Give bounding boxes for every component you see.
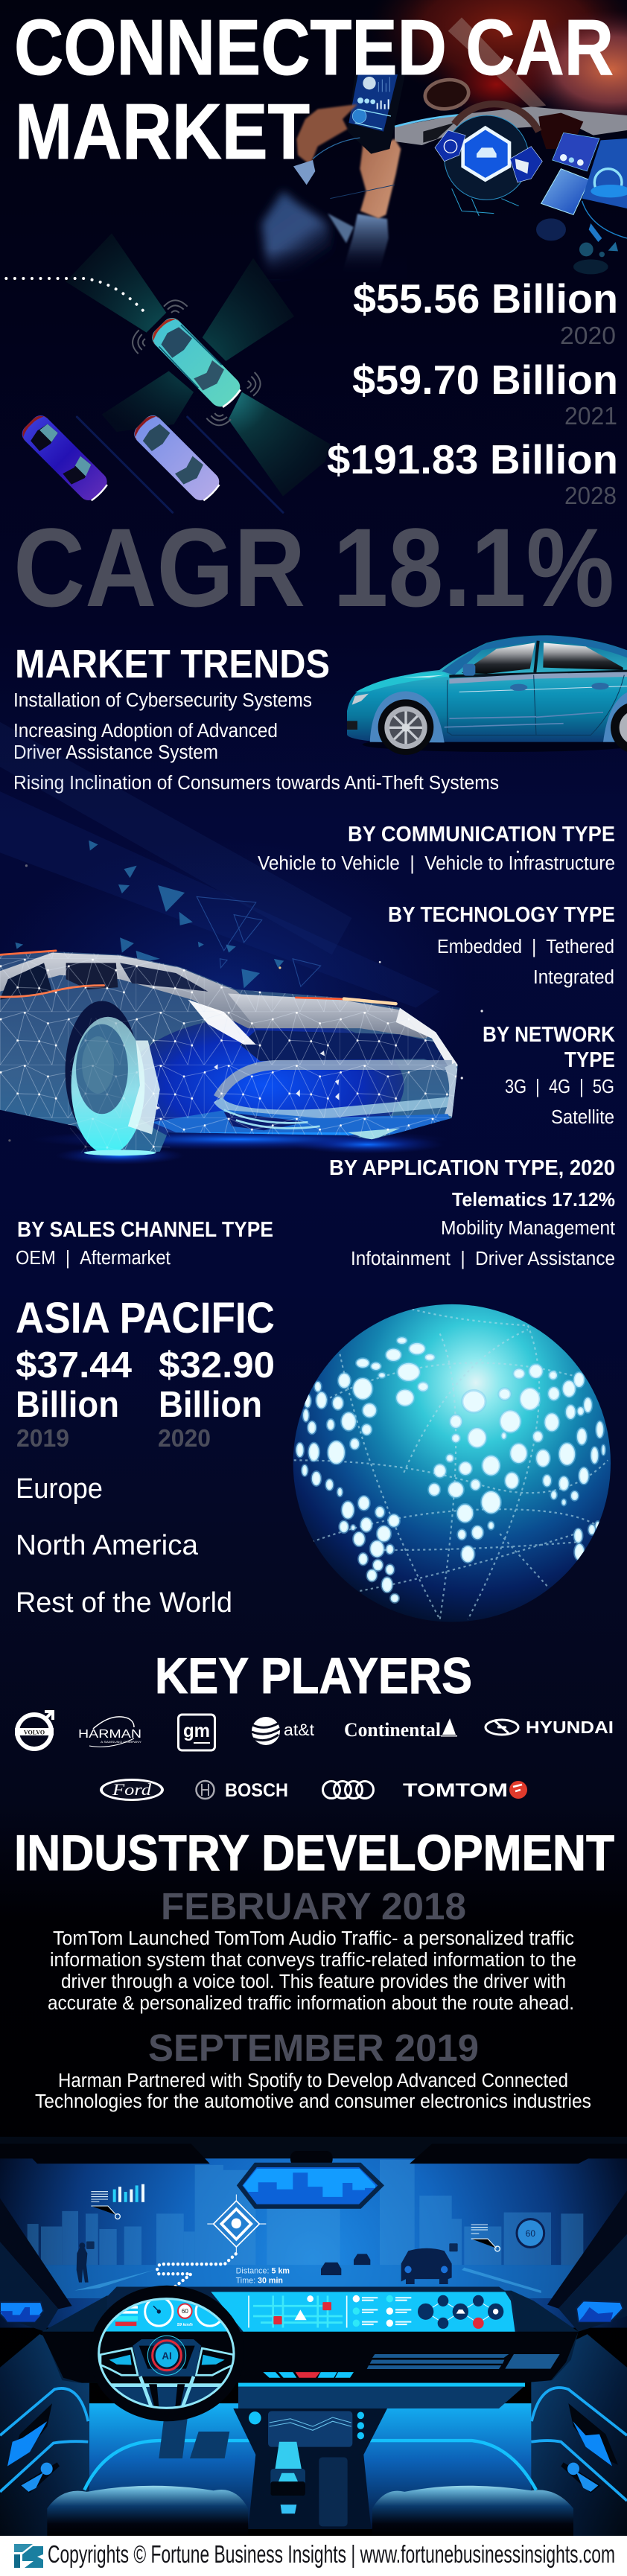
logo: Harman: HARMAN	[78, 1728, 141, 1741]
pillars and side mirrors	[0, 2190, 627, 2332]
other regions: Rest of the World	[16, 1587, 232, 1619]
text: TomTom development	[48, 1928, 576, 2014]
logo: Harman	[78, 1717, 141, 1747]
logo: TomTom	[403, 1780, 527, 1801]
dotted route	[6, 278, 148, 316]
hud graphics	[77, 2184, 544, 2291]
rearview mirror	[240, 2165, 381, 2207]
segment: by application type: Telematics 17.12%	[452, 1188, 615, 1211]
segment: by application type: Mobility Management	[441, 1218, 615, 1239]
market size figures: 2021	[564, 402, 617, 430]
value 2020: $32.90	[159, 1345, 275, 1386]
logo: Volvo: VOLVO	[24, 1729, 45, 1736]
trend list	[13, 690, 499, 794]
segment: by application type: Infotainment | Driver Assistance	[351, 1249, 615, 1269]
trend list: Rising Inclination of Consumers towards Anti-Theft Systems	[13, 773, 499, 794]
value 2020: 2020	[158, 1424, 211, 1452]
segment: by sales channel type	[16, 1218, 273, 1269]
value 2019: 2019	[16, 1424, 69, 1452]
illustration: teal sedan side view	[347, 635, 627, 755]
logo: Audi rings	[323, 1781, 374, 1799]
hud graphics: Time: 30 min	[236, 2276, 283, 2286]
segment: by communication type: BY COMMUNICATION TYPE	[348, 823, 615, 847]
segment: by sales channel type: OEM | Aftermarket	[16, 1248, 171, 1269]
steering wheel	[89, 2286, 244, 2421]
segment: by communication type: Vehicle to Vehicle | Vehicle to Infrastructure	[258, 853, 615, 874]
footer	[0, 2536, 627, 2576]
illustration: driver using tablet in connected car cockpit	[258, 0, 627, 279]
value 2019: $37.44	[16, 1345, 132, 1386]
text: Harman development: Harman Partnered with Spotify to Develop Advanced Connected	[58, 2070, 568, 2091]
illustration: polygonal wireframe car	[0, 722, 519, 1164]
text: Harman development	[35, 2070, 591, 2112]
segment: by application type	[329, 1156, 615, 1269]
logo: Harman: A SAMSUNG COMPANY	[101, 1740, 141, 1744]
title: MARKET	[15, 88, 310, 176]
segment: by sales channel type: BY SALES CHANNEL TYPE	[17, 1218, 273, 1242]
center console	[159, 2408, 387, 2529]
trend list: Installation of Cybersecurity Systems	[13, 690, 312, 711]
main teal car	[148, 314, 244, 411]
windshield view with city	[0, 2137, 627, 2328]
logo: Ford: Ford	[112, 1780, 152, 1799]
trend list: Increasing Adoption of Advanced	[13, 721, 278, 742]
dash trim lights	[84, 2440, 536, 2490]
logo: Bosch: BOSCH	[225, 1780, 288, 1801]
illustration: connected car dashboard interior	[0, 2137, 627, 2537]
value 2020: Billion	[159, 1385, 262, 1425]
text: TomTom development: driver through a voice tool. This feature provides the driver with	[61, 1971, 566, 1992]
regional panel: Asia Pacific values and other regions	[16, 1294, 275, 1619]
company logos row 2	[100, 1779, 527, 1801]
market trends heading and drivers	[13, 642, 499, 794]
text: Harman development: Technologies for the automotive and consumer electronics industries	[35, 2091, 591, 2112]
logo: Hyundai: HYUNDAI	[526, 1718, 614, 1737]
logo: Volvo	[15, 1712, 54, 1749]
segment: by technology type: Embedded | Tethered	[437, 937, 614, 957]
logo: AT&T	[252, 1717, 314, 1745]
parked purple car	[18, 412, 111, 505]
logo: GM: gm	[183, 1721, 210, 1741]
seats	[47, 2486, 573, 2537]
market size figures: $55.56 Billion	[353, 275, 618, 322]
logo: Ford	[100, 1779, 164, 1801]
hud graphics: 60	[526, 2228, 535, 2239]
logo: Hyundai	[486, 1718, 614, 1737]
parked lavender car	[130, 412, 223, 505]
logo: Bosch	[197, 1780, 288, 1801]
steering wheel: 59 km/h	[177, 2323, 193, 2327]
sensor beams	[66, 233, 330, 497]
logo: Fortune Business Insights	[14, 2544, 43, 2568]
segment: by network type: Satellite	[551, 1107, 614, 1128]
door lights and controls	[0, 2388, 627, 2501]
logo: TomTom: TOMTOM	[403, 1780, 508, 1801]
value 2019: Billion	[16, 1385, 119, 1425]
logo: Continental: Continental	[344, 1719, 441, 1741]
company logos row 1	[15, 1712, 614, 1750]
text: TomTom development: accurate & personalized traffic information about the route ahead.	[48, 1993, 574, 2014]
segment: by network type: BY NETWORK	[483, 1023, 615, 1047]
signal waves	[133, 300, 261, 425]
cars on the road	[321, 2248, 452, 2284]
segment: by network type: TYPE	[564, 1048, 615, 1072]
value 2020	[158, 1345, 275, 1452]
date: February 2018: FEBRUARY 2018	[161, 1885, 466, 1928]
heading: Asia Pacific: ASIA PACIFIC	[16, 1294, 275, 1342]
other regions: Europe	[16, 1473, 103, 1505]
value 2019	[16, 1345, 132, 1452]
heading: market trends: MARKET TRENDS	[15, 642, 330, 686]
market size figures: 2028	[564, 482, 617, 509]
text: TomTom development: information system that conveys traffic-related information to the	[50, 1950, 576, 1971]
instrument display	[106, 2286, 518, 2332]
other regions: North America	[16, 1530, 199, 1561]
steering wheel: 60	[182, 2308, 188, 2315]
segment: by technology type: Integrated	[533, 967, 614, 988]
date: September 2019: SEPTEMBER 2019	[148, 2027, 479, 2069]
logo: GM	[179, 1715, 214, 1750]
lower cabin	[0, 2291, 627, 2537]
logo: AT&T: at&t	[284, 1721, 314, 1739]
segment: by technology type	[388, 903, 615, 988]
title	[14, 4, 614, 176]
hud graphics: Distance: 5 km	[236, 2266, 290, 2276]
market size figures: 2020	[560, 322, 616, 349]
market size figures: $59.70 Billion	[352, 357, 618, 403]
segment: by network type	[483, 1023, 615, 1128]
segment: by application type: BY APPLICATION TYPE, 2020	[329, 1156, 615, 1180]
steering wheel: AI	[162, 2350, 172, 2362]
illustration: glowing globe	[293, 1304, 612, 1622]
segment: by communication type	[258, 823, 615, 874]
illustration: autonomous cars from above with sensor beams	[6, 233, 330, 512]
trend list: Driver Assistance System	[13, 742, 218, 763]
market size figures	[327, 275, 618, 509]
industry development section	[14, 1825, 614, 2112]
market size figures: $191.83 Billion	[327, 436, 618, 482]
other regions	[16, 1473, 232, 1619]
heading: key players: KEY PLAYERS	[155, 1648, 472, 1704]
text: TomTom development: TomTom Launched TomTom Audio Traffic- a personalized traffic	[53, 1928, 574, 1949]
